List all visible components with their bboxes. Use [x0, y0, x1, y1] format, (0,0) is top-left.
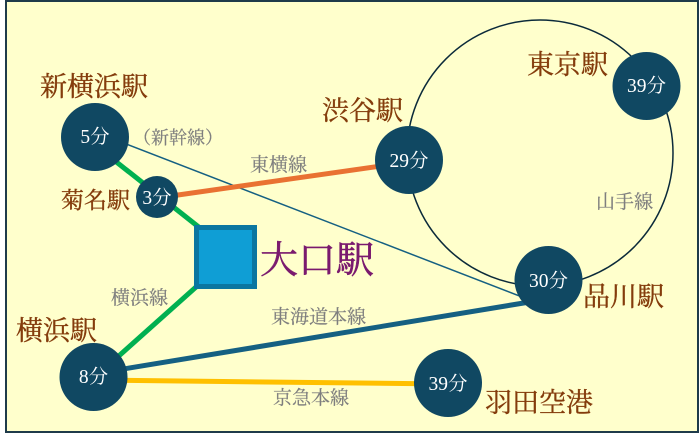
label: Tokaido line: 東海道本線 — [271, 306, 366, 328]
station: Kikuna: 菊名駅 — [61, 188, 130, 213]
station: Shinagawa: 品川駅 — [583, 282, 664, 312]
label: Yamanote line: 山手線 — [596, 191, 653, 213]
label: Shinkansen: （新幹線） — [133, 128, 223, 148]
line: Yokohama line lower — [93, 279, 205, 379]
label: Keikyu line: 京急本線 — [273, 387, 349, 409]
station: Yokohama — [16, 316, 128, 411]
line: Keikyu — [93, 380, 448, 384]
main station label: 大口駅 — [260, 240, 374, 282]
station: Tokyo: 東京駅 — [527, 50, 608, 80]
line: Toyoko — [157, 162, 409, 198]
station: Tokyo — [527, 50, 680, 120]
line: Shinkansen — [95, 132, 548, 307]
line: Tokaido — [93, 299, 548, 374]
station: Haneda Airport — [414, 349, 593, 418]
station: Shibuya: 29分 — [389, 150, 429, 172]
station: Yokohama: 8分 — [79, 366, 108, 388]
station: Yokohama: 横浜駅 — [16, 316, 97, 346]
station: Kikuna — [61, 176, 178, 218]
station: Shin-Yokohama: 新横浜駅 — [40, 72, 148, 102]
label: Yokohama line: 横浜線 — [111, 287, 168, 309]
station: Haneda Airport: 39分 — [428, 373, 468, 395]
station: Tokyo: 39分 — [627, 75, 666, 97]
label: Toyoko line: 東横線 — [250, 154, 307, 176]
station: Shin-Yokohama: 5分 — [80, 126, 110, 148]
station: Shibuya: 渋谷駅 — [322, 96, 403, 126]
station: Shinagawa: 30分 — [529, 270, 568, 292]
station: Shin-Yokohama — [40, 72, 148, 171]
station: Shinagawa — [514, 246, 664, 314]
main station square — [196, 228, 254, 286]
line: Yokohama line upper — [100, 149, 205, 232]
station: Kikuna: 3分 — [142, 187, 172, 209]
station: Haneda Airport: 羽田空港 — [485, 388, 593, 418]
line: Yamanote loop — [407, 20, 673, 286]
station: Shibuya — [322, 96, 443, 194]
